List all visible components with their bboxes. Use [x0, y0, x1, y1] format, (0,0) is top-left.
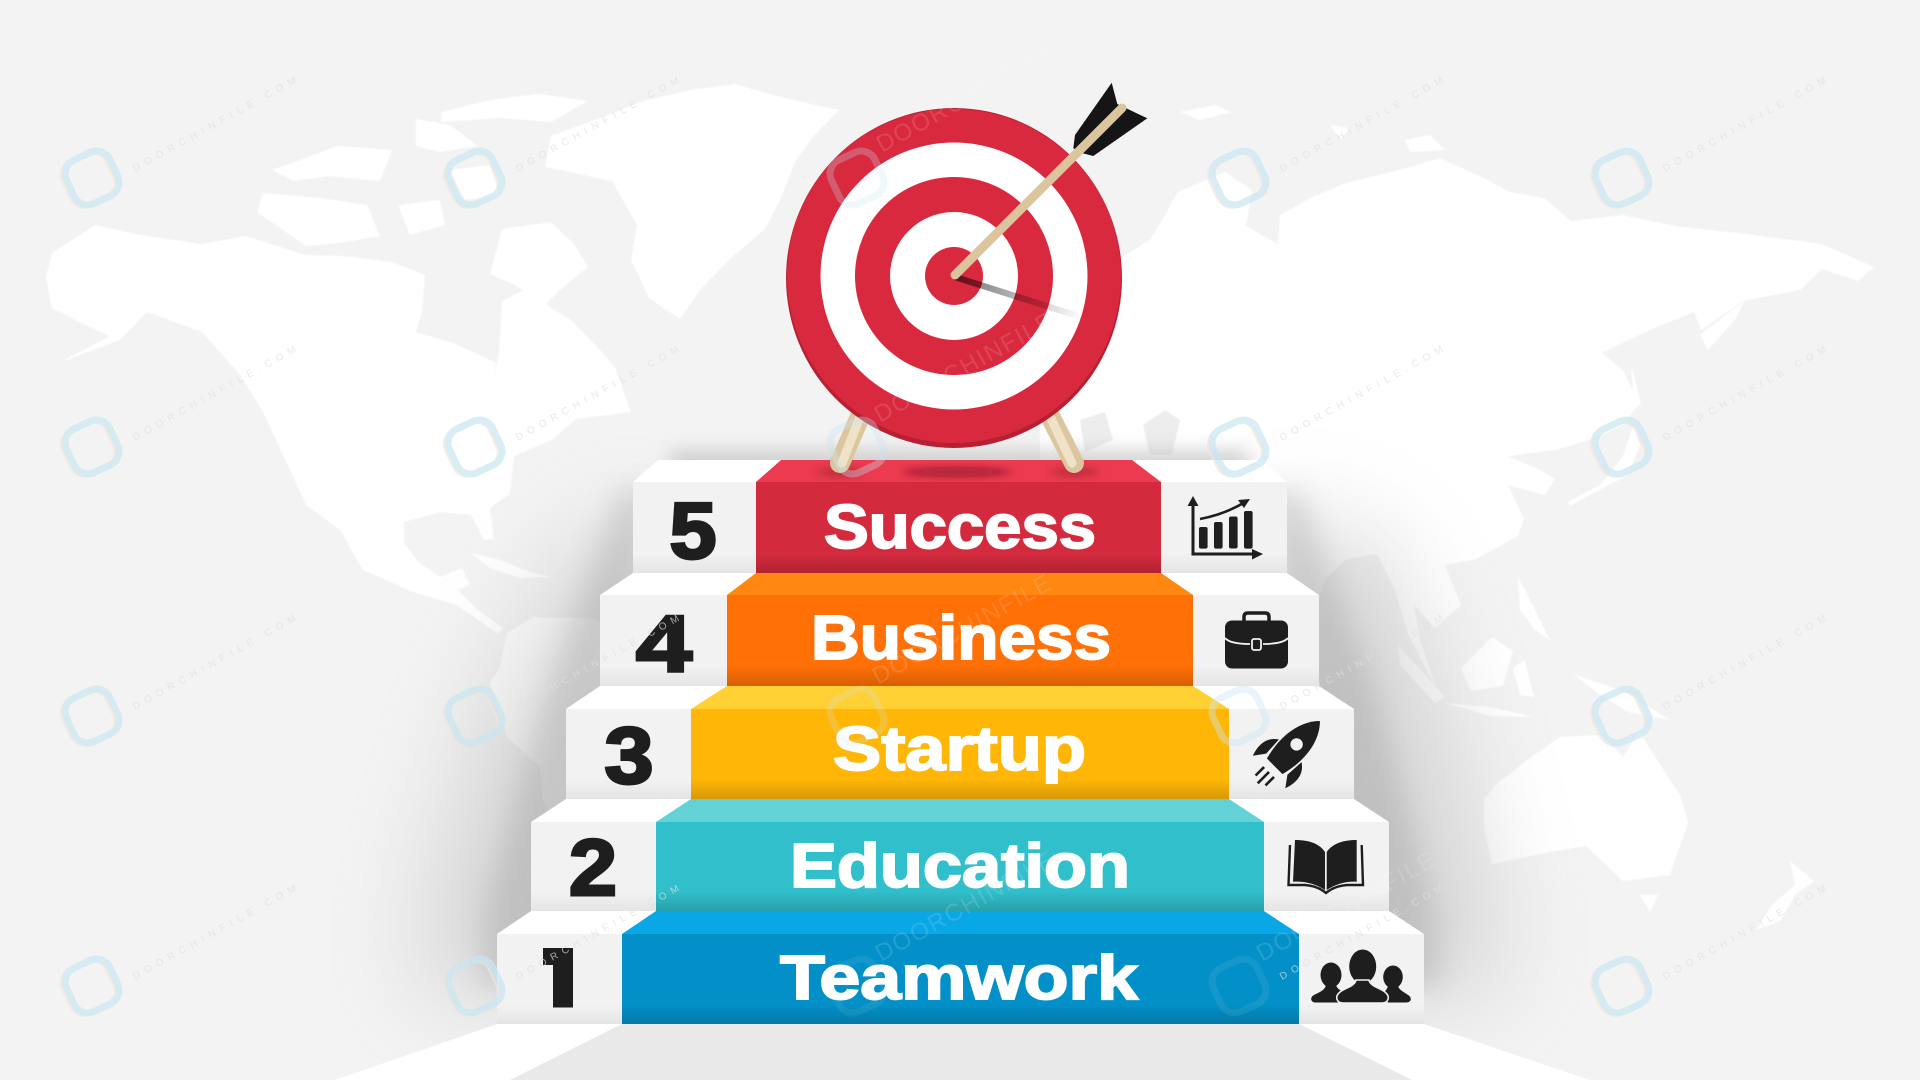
- watermark text: DOORCHINFILE.COM: [1661, 883, 1828, 983]
- watermark text: DOORCHINFILE.COM: [1278, 75, 1445, 175]
- icon: briefcase: [1225, 613, 1288, 668]
- map: north Atlantic islands: [1180, 105, 1445, 152]
- watermark text: DOORCHINFILE.COM: [131, 613, 298, 713]
- step 4: Business: 4: [636, 599, 693, 688]
- large watermark text: DOORCHINFILE: [870, 308, 1058, 428]
- step 2: Education: Education: [790, 832, 1130, 901]
- stair shadow: right: [1270, 490, 1500, 1000]
- large watermark text: [868, 38, 1440, 967]
- step 4: Business: Business: [811, 604, 1111, 673]
- target legs: [816, 412, 1099, 477]
- watermark text: DOORCHINFILE.COM: [1661, 613, 1828, 713]
- large watermark text: DOORCHINFILE: [872, 38, 1060, 158]
- watermark text: DOORCHINFILE.COM: [514, 883, 681, 983]
- step 3: Startup: Startup: [833, 715, 1086, 784]
- large watermark text: DOORCHINFILE: [871, 847, 1059, 967]
- staircase: [497, 460, 1424, 1024]
- large watermark text: DOORCHINFILE: [1252, 847, 1440, 967]
- arrow shadow: [954, 274, 1082, 320]
- map: Greenland: [545, 84, 839, 319]
- step 5: Success: [633, 460, 1287, 575]
- ground shadow: [902, 468, 1012, 476]
- step 4: Business: [600, 573, 1319, 688]
- watermark text: DOORCHINFILE.COM: [1661, 75, 1828, 175]
- step 1: Teamwork: Teamwork: [780, 944, 1139, 1013]
- map: Caribbean islands: [471, 553, 551, 578]
- target rings: [786, 108, 1122, 448]
- number 1: [543, 948, 573, 1008]
- map: Arctic islands: [257, 94, 588, 305]
- map: Eurasia and Africa: [900, 158, 1874, 900]
- map: Asian islands: [1398, 300, 1745, 720]
- watermark text: DOORCHINFILE.COM: [1278, 883, 1445, 983]
- large watermark text: DOORCHINFILE: [868, 570, 1056, 690]
- step 2: Education: [531, 799, 1389, 912]
- step 1: Teamwork: [497, 911, 1424, 1024]
- icon: growth chart: [1188, 496, 1263, 560]
- map: South America: [490, 617, 760, 1000]
- icon: team of people: [1311, 950, 1411, 1003]
- watermark text: DOORCHINFILE.COM: [1661, 344, 1828, 444]
- stair shadow: left: [420, 490, 650, 1000]
- map: Australia: [1484, 732, 1688, 912]
- floor: [335, 1024, 1590, 1080]
- step 3: Startup: [566, 686, 1354, 801]
- watermark text: DOORCHINFILE.COM: [131, 344, 298, 444]
- watermark logos: [57, 146, 1654, 1019]
- map: Mediterranean sea: [1080, 410, 1180, 455]
- icon: open book: [1288, 840, 1363, 893]
- icon: rocket: [1240, 703, 1338, 801]
- number 1: 1: [541, 934, 585, 1023]
- map: North America: [46, 225, 631, 634]
- watermark text: DOORCHINFILE.COM: [1278, 344, 1445, 444]
- watermark text: [131, 75, 1828, 983]
- arrow: [955, 83, 1147, 275]
- step 2: Education: 2: [569, 823, 617, 912]
- watermark text: DOORCHINFILE.COM: [514, 344, 681, 444]
- stair shadow: top: [670, 450, 1250, 480]
- step 3: Startup: 3: [604, 711, 654, 800]
- watermark text: DOORCHINFILE.COM: [514, 75, 681, 175]
- target on stand: [786, 83, 1147, 477]
- watermark text: DOORCHINFILE.COM: [131, 75, 298, 175]
- map: New Zealand: [1756, 861, 1814, 930]
- step 5: Success: Success: [824, 493, 1096, 562]
- watermark text: DOORCHINFILE.COM: [1278, 613, 1445, 713]
- step 5: Success: 5: [670, 486, 716, 575]
- watermark text: DOORCHINFILE.COM: [514, 613, 681, 713]
- watermark text: DOORCHINFILE.COM: [131, 883, 298, 983]
